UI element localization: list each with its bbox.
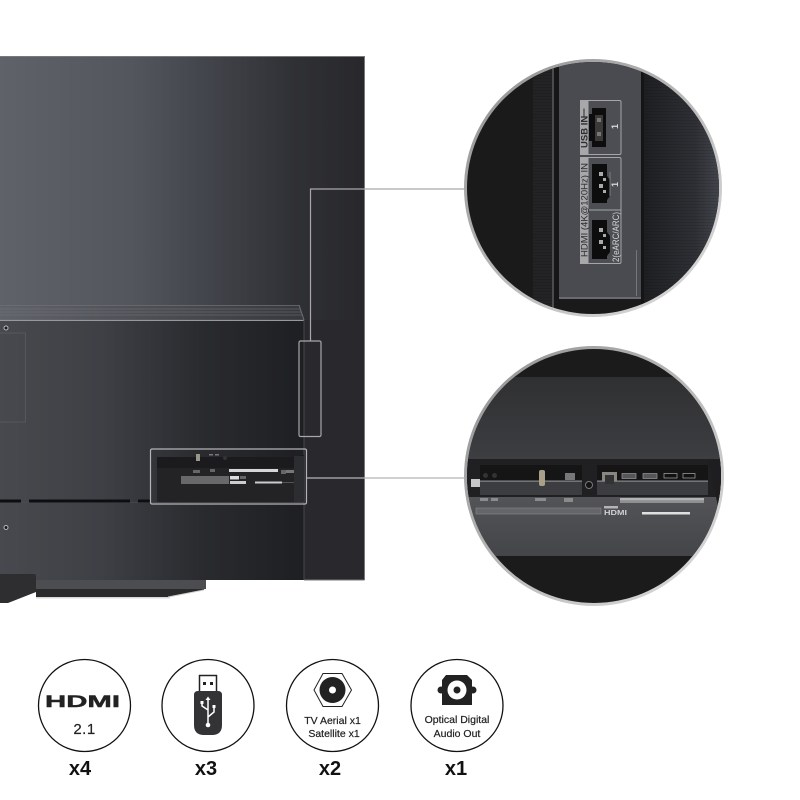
TV lower body [0,320,304,580]
USB port label block: USB IN [580,116,590,148]
HDMI port label block: 1 [610,182,620,187]
left connector bay [471,465,582,495]
HDMI port 1 [592,164,610,203]
panel: side ports magnified circle [460,55,730,325]
TV rear panel [0,56,365,603]
count: HDMI: x4 [69,758,92,780]
callout: rear ports highlight and leader [150,449,466,504]
HDMI port label block: 2(eARC/ARC) [611,212,621,262]
connection: aerial and satellite [286,660,378,780]
connection: USB [162,660,254,780]
right connector bay [597,465,708,495]
stand foot [0,574,36,603]
model code text [636,250,637,296]
HDMI port label block [580,157,621,264]
USB port label block: 1 [610,124,620,129]
icon: USB stick [162,660,254,752]
panel: rear ports magnified circle [460,340,730,610]
icon: coaxial connector [286,660,378,752]
connection: HDMI [38,660,130,780]
connection: optical audio [411,660,503,780]
count: optical audio: x1 [445,758,467,780]
count: aerial and satellite: x2 [319,758,341,780]
label: aerial and satellite: TV Aerial x1 [304,715,361,727]
label: optical audio: Audio Out [434,728,480,740]
callout: side ports highlight and leader [299,189,465,436]
TV top hump [0,305,304,320]
icon: HDMI circle: 2.1 [73,721,96,738]
HDMI port label block: HDMI (4K@120Hz) IN [580,163,590,257]
label: aerial and satellite: Satellite x1 [308,728,360,740]
HDMI port 2 [592,220,610,259]
rear terminal recess [157,454,304,502]
printed labels [476,498,704,515]
stand base [36,580,206,598]
label: optical audio: Optical Digital [425,714,489,726]
icon: HDMI circle [38,660,130,752]
icon: HDMI circle: HDMI [45,693,120,711]
printed labels: HDMI [604,510,627,517]
icon: optical port [411,660,503,752]
USB port label block [580,100,621,155]
count: USB: x3 [195,758,217,780]
center notch [586,482,592,488]
